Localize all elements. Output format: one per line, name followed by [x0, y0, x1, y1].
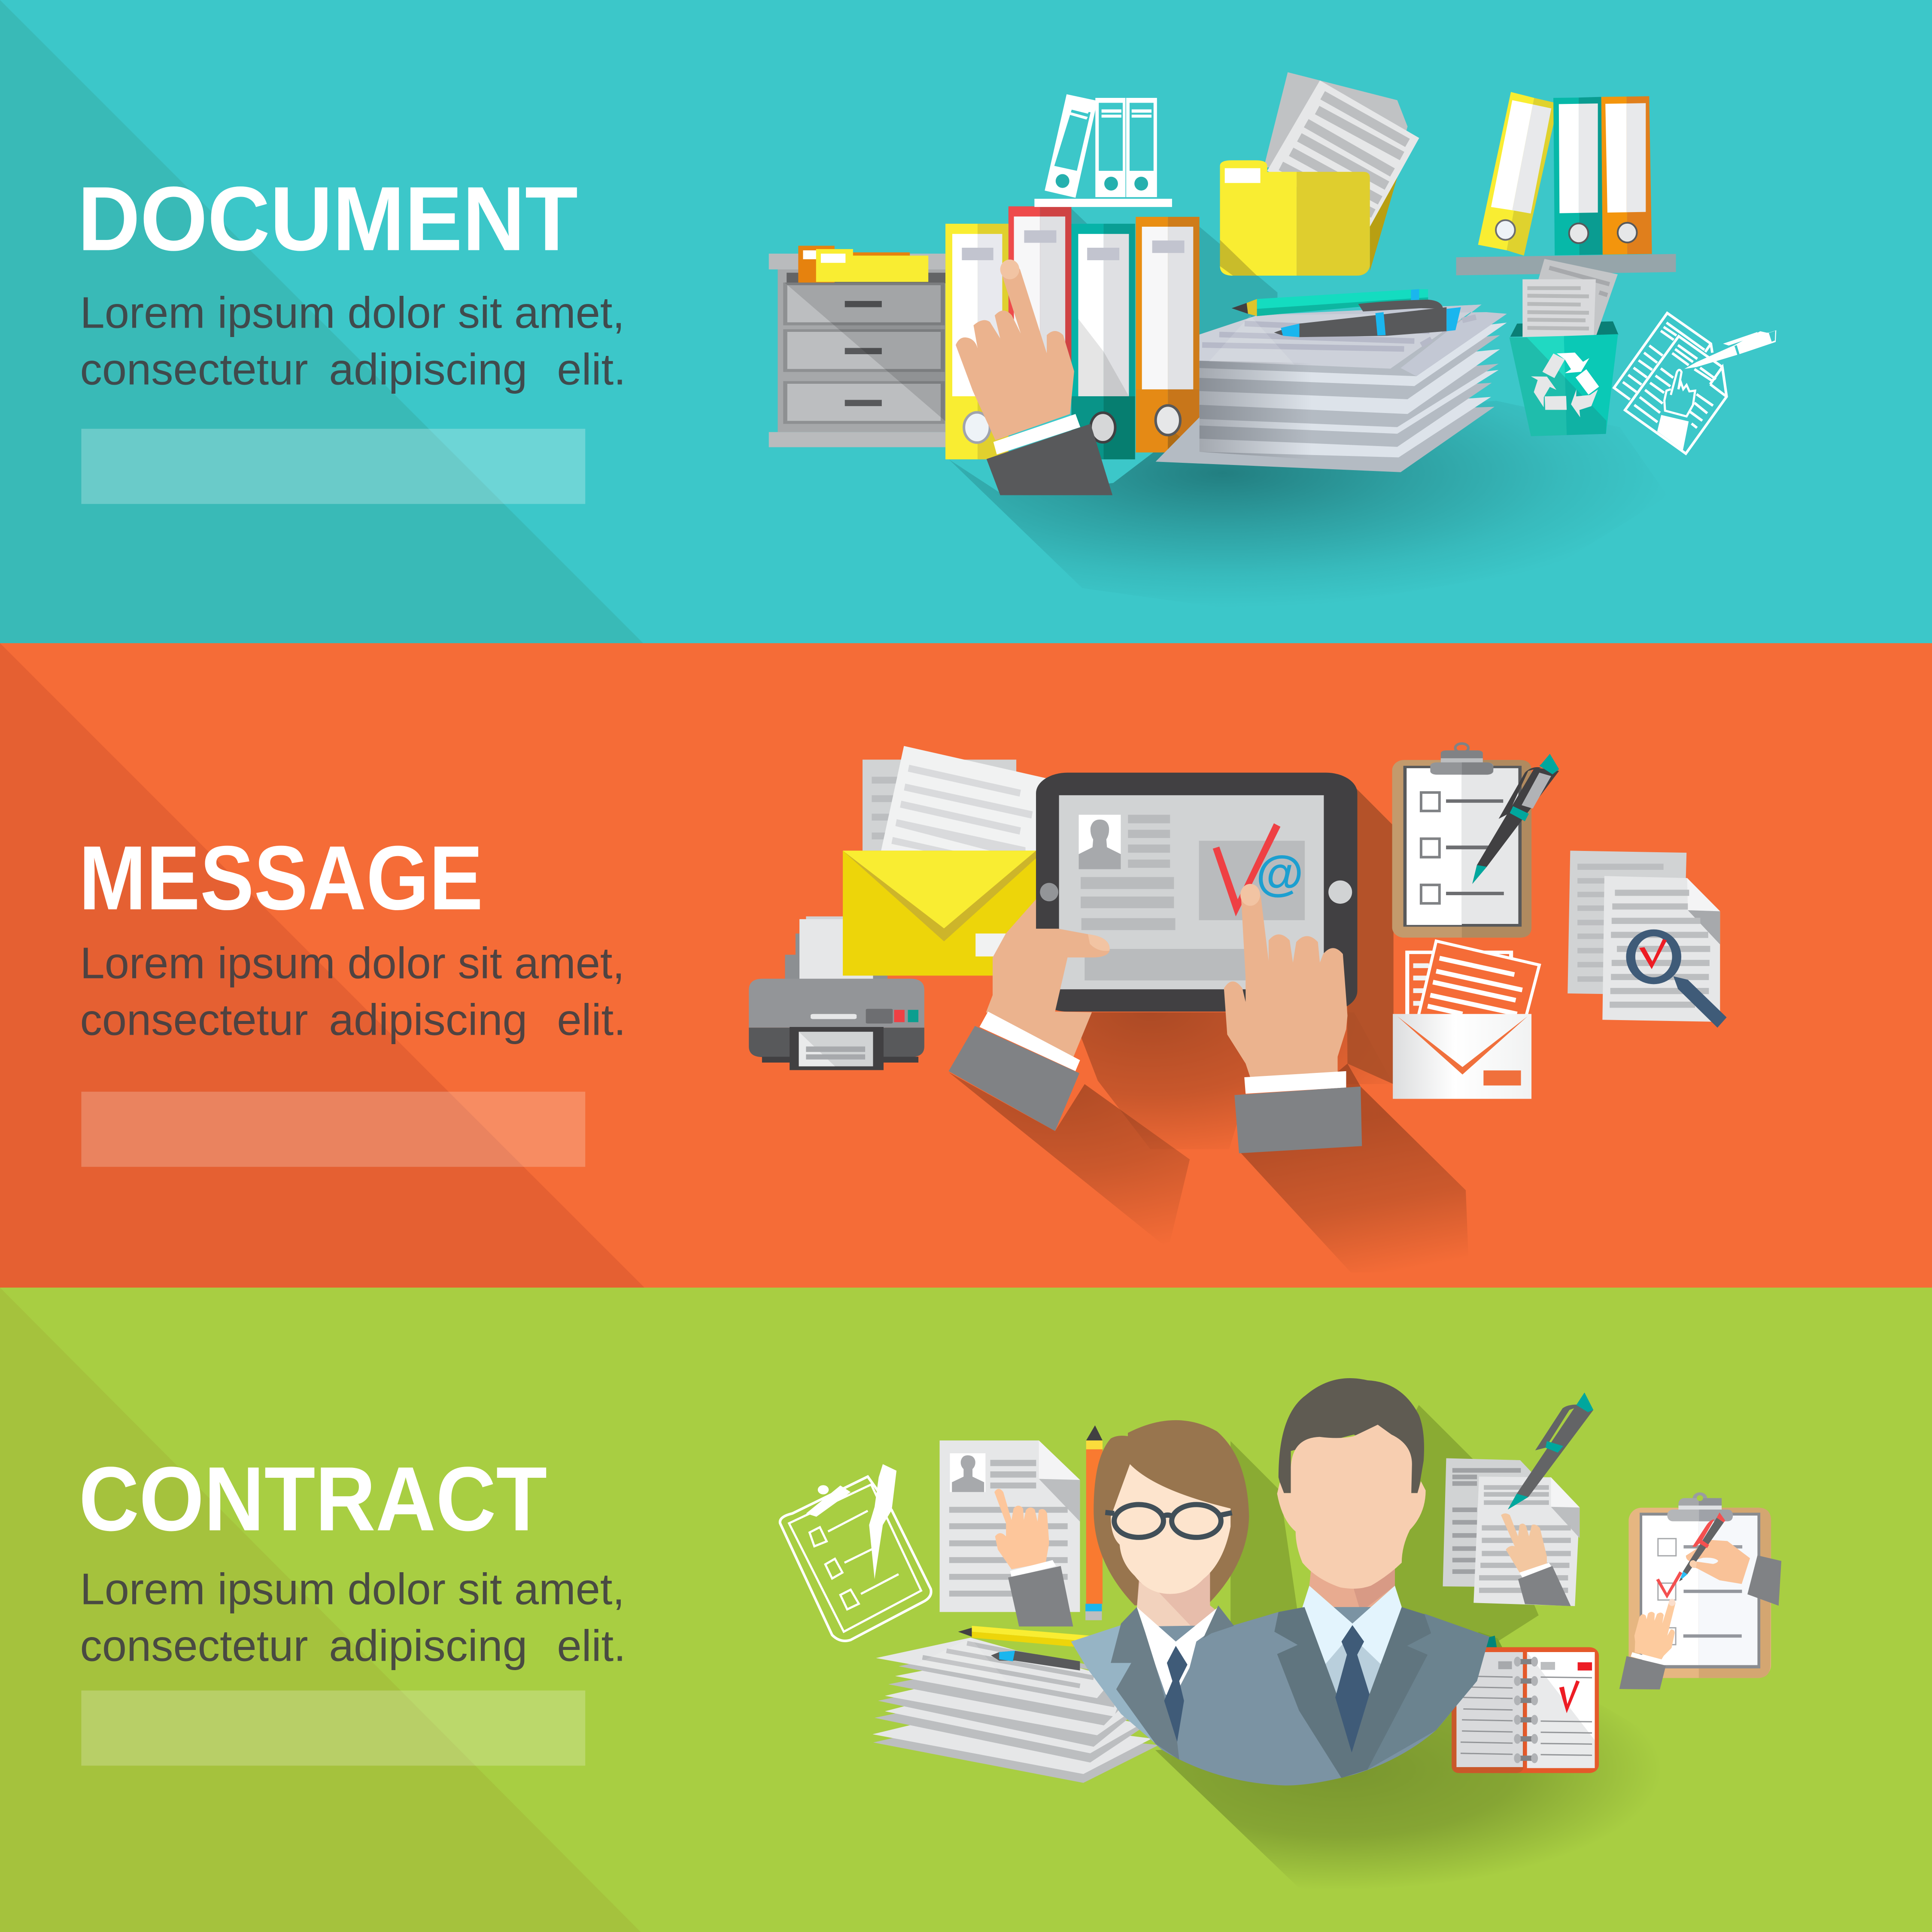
body text: message [80, 938, 626, 1045]
icon: man [1277, 1378, 1426, 1623]
diagonal shade [0, 1288, 641, 1932]
icon: papers and bin rim [1510, 259, 1619, 338]
icon: right documents with hand [1443, 1458, 1580, 1606]
icon: yellow binder [945, 224, 1009, 459]
panel: message [0, 643, 1932, 1289]
profile photo [1079, 815, 1121, 869]
illustration: document desk [769, 72, 1676, 614]
body text: document: consectetur [80, 344, 308, 394]
icon: yellow envelope [843, 851, 1036, 975]
long shadows [949, 209, 1668, 614]
body text: document: adipiscing [329, 344, 527, 394]
icon: yellow folder with papers [1220, 72, 1419, 276]
long shadows [949, 783, 1469, 1273]
body text: contract [80, 1564, 626, 1671]
body text: message: Lorem ipsum dolor sit amet, [80, 938, 625, 988]
long shadows [1155, 1405, 1662, 1898]
icon: recycling bin [1510, 334, 1618, 436]
body text: document: elit. [557, 344, 626, 394]
magnifier [1626, 930, 1727, 1028]
icon: open white envelope with orange letters [1393, 941, 1539, 1099]
icon: clipboard with two hands [1619, 1492, 1781, 1689]
icon: paper stack [1156, 304, 1507, 472]
icon: right hand [1224, 884, 1362, 1153]
woman shirt and lapels [1137, 1607, 1224, 1701]
icon: tablet [1036, 773, 1357, 1012]
icon: printer [749, 916, 924, 1070]
clip [1667, 1492, 1733, 1521]
body text: document: Lorem ipsum dolor sit amet, [80, 287, 625, 337]
diagonal shade [0, 643, 644, 1288]
diagonal shade [0, 0, 643, 643]
icon: teal pencil [1232, 289, 1428, 316]
icon: binders on shelf [1478, 92, 1652, 255]
icon: white binders on a shelf [1034, 94, 1172, 207]
heading: DOCUMENT: DOCUMENT [78, 168, 578, 270]
pointing hand [994, 1489, 1073, 1626]
icon: red binder [1009, 207, 1072, 384]
icon: gray pen [1274, 300, 1461, 337]
icon: filing cabinet [769, 246, 945, 447]
icon: resume [940, 1440, 1080, 1626]
body text: message: adipiscing [329, 995, 527, 1045]
icon: paper stack with pens [872, 1626, 1159, 1783]
button bar: document [81, 429, 585, 504]
teal banner background [0, 0, 1932, 644]
heading: MESSAGE: MESSAGE [79, 827, 483, 929]
icon: suits [1071, 1586, 1489, 1786]
upper hand with pen [1656, 1513, 1781, 1606]
red check mark [1213, 823, 1280, 916]
icon: notebook [1452, 1632, 1599, 1773]
panel: contract [0, 1288, 1932, 1932]
heading: CONTRACT: CONTRACT [79, 1448, 547, 1550]
icon: recycle symbol [1531, 352, 1599, 417]
illustration: message tablet [749, 744, 1727, 1273]
icon: hand pointing at binders [956, 260, 1112, 495]
illustration: contract people [780, 1378, 1662, 1898]
lower hand pointing [1619, 1599, 1676, 1689]
icon: teal binder [1072, 224, 1135, 459]
panel: document [0, 0, 1932, 644]
body text: contract: Lorem ipsum dolor sit amet, [80, 1564, 625, 1614]
man shirt and lapels [1303, 1586, 1402, 1698]
glasses [1105, 1504, 1232, 1537]
icon: orange binder [1136, 217, 1200, 453]
icon: papers behind envelope [863, 746, 1052, 856]
icon: orange pencil [1085, 1425, 1103, 1620]
button bar: message [81, 1092, 585, 1167]
body text: message: consectetur [80, 995, 308, 1045]
body text: contract: consectetur [80, 1621, 308, 1671]
shelf [1456, 254, 1676, 275]
icon: white outline document with hand and pen [1614, 313, 1776, 454]
icon: clipboard with pen [1392, 744, 1559, 938]
icon: white outline clipboard [780, 1464, 931, 1641]
icon: woman [1094, 1420, 1249, 1642]
body text: contract: elit. [557, 1621, 626, 1671]
body text: message: elit. [557, 995, 626, 1045]
body text: contract: adipiscing [329, 1621, 527, 1671]
icon: documents with magnifier [1567, 851, 1727, 1028]
pen [1684, 330, 1776, 369]
button bar: contract [81, 1691, 585, 1766]
icon: left hand [949, 899, 1110, 1131]
pen [1472, 754, 1559, 884]
at sign: @ [1256, 846, 1303, 900]
icon: large gray pen [1508, 1392, 1593, 1510]
orange banner background [0, 643, 1932, 1289]
body text: document [80, 287, 626, 394]
green banner background [0, 1288, 1932, 1932]
